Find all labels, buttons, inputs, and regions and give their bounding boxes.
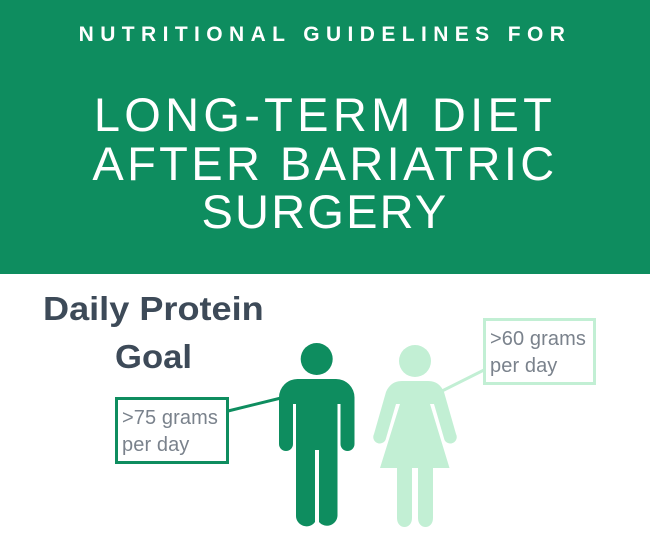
icon: woman [373, 345, 457, 527]
main title: AFTER BARIATRIC [92, 136, 558, 190]
callout: female protein goal: per day [490, 355, 557, 377]
header banner [0, 0, 650, 274]
callout: male protein goal: per day [122, 434, 189, 456]
callout: female protein goal: >60 grams [490, 328, 586, 350]
main title: SURGERY [202, 185, 448, 238]
section heading line one: Daily Protein [43, 290, 264, 327]
section heading line two: Goal [115, 338, 192, 375]
connector: male callout [228, 398, 281, 411]
callout: male protein goal: >75 grams [122, 407, 218, 429]
kicker heading: NUTRITIONAL GUIDELINES FOR [79, 23, 571, 46]
main title: LONG-TERM DIET [94, 88, 556, 141]
callout: male protein goal [115, 397, 229, 464]
connector: female callout [440, 370, 484, 392]
callout: female protein goal [483, 318, 596, 385]
main title [92, 88, 558, 238]
icon: man [279, 343, 354, 526]
